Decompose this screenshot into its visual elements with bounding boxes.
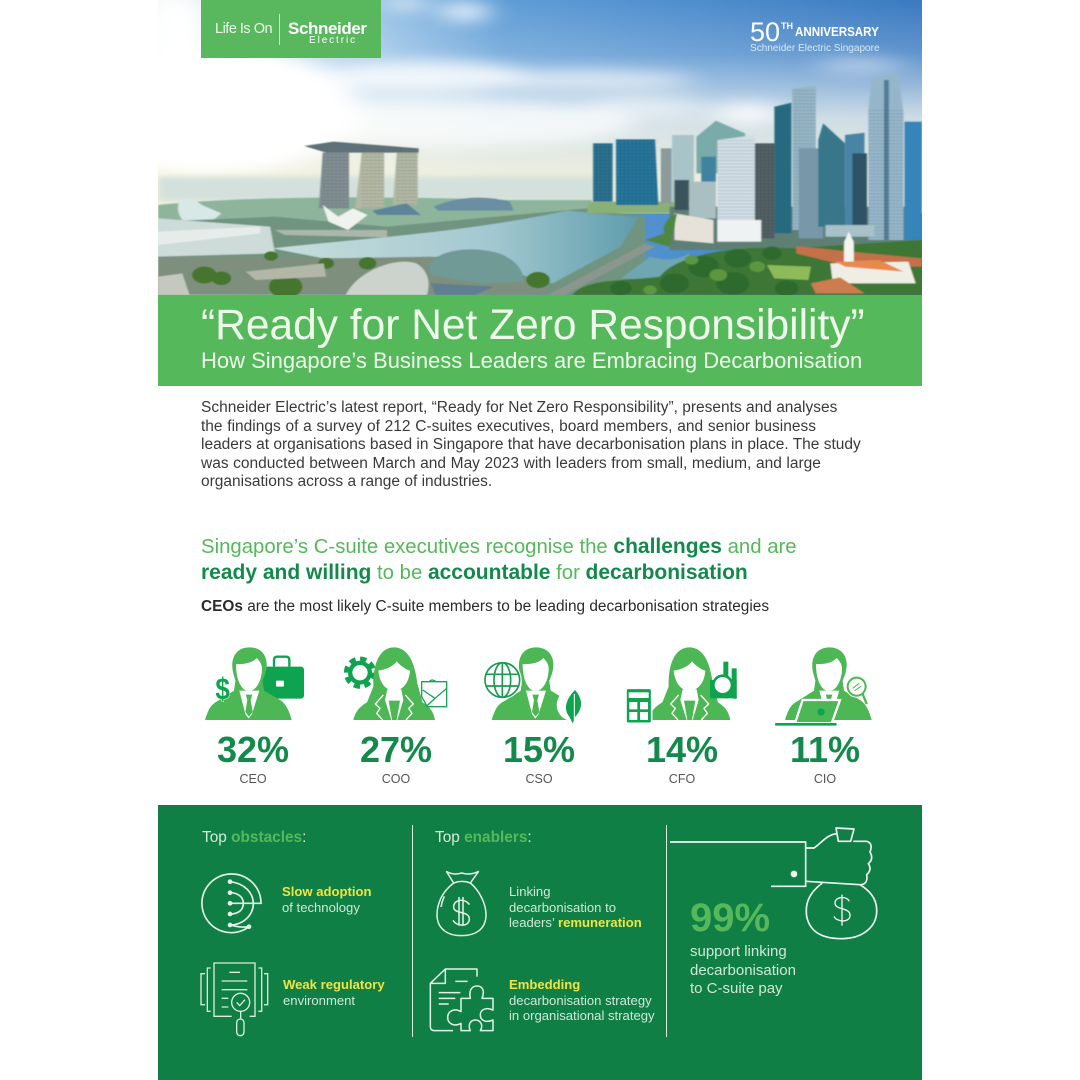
logo tagline — [215, 21, 272, 37]
logo tagline: On — [254, 21, 272, 37]
icon: COO — [346, 647, 447, 720]
intro paragraph: Schneider Electric’s latest report, “Ready for Net Zero Responsibility”, presents and analyses — [201, 399, 837, 416]
TH superscript: TH — [781, 21, 793, 31]
section heading: ready and willing to be accountable for decarbonisation — [201, 561, 748, 584]
icon: CEO — [205, 647, 304, 720]
logo sub name: Electric — [309, 35, 357, 46]
enabler: embedding: decarbonisation strategy — [509, 992, 652, 1008]
Marina Bay Sands — [158, 142, 645, 295]
stat: CFO: 14% — [646, 729, 718, 770]
anniversary subtitle: Schneider Electric Singapore — [750, 43, 880, 54]
enabler: remuneration: leaders’ remuneration — [509, 915, 642, 930]
icon: hand holding money bag — [670, 827, 878, 940]
stat: CSO: CSO — [525, 772, 553, 786]
icon: money bag — [436, 870, 487, 936]
icon: puzzle document — [430, 968, 494, 1032]
panel: obstacles and enablers — [158, 805, 922, 1080]
obstacle: slow adoption: Slow adoption — [282, 884, 371, 899]
icon: CEO: $ — [215, 672, 230, 707]
title banner — [158, 295, 922, 386]
subtitle: How Singapore’s Business Leaders are Embracing Decarbonisation — [201, 348, 862, 373]
stat: CSO: 15% — [503, 729, 575, 770]
anniversary word: ANNIVERSARY — [795, 24, 879, 39]
main title: “Ready for Net Zero Responsibility” — [201, 302, 865, 349]
section heading: Singapore’s C-suite executives recognise the challenges and are — [201, 535, 797, 558]
role icons row — [205, 647, 872, 726]
enabler: remuneration: Linking — [509, 884, 550, 899]
stat: CIO: CIO — [814, 772, 836, 786]
icon: regulation document — [200, 962, 268, 1036]
logo tagline: Life Is — [215, 21, 250, 37]
intro paragraph: leaders at organisations based in Singapore that have decarbonisation plans in place. The study — [201, 436, 861, 453]
stat: 99 percent: 99% — [690, 896, 770, 940]
intro paragraph: was conducted between March and May 2023 with leaders from small, medium, and large — [201, 455, 821, 472]
obstacle: weak regulation: environment — [283, 992, 355, 1008]
logo block — [201, 0, 381, 58]
stat caption: to C-suite pay — [690, 980, 783, 997]
icon: technology circuit — [201, 873, 262, 934]
stat: CFO: CFO — [669, 772, 695, 786]
stat: CEO: 32% — [217, 729, 289, 770]
icon: CIO — [775, 647, 872, 726]
enabler: remuneration: decarbonisation to — [509, 900, 616, 914]
intro paragraph: organisations across a range of industries. — [201, 473, 492, 490]
stat: CIO: 11% — [790, 729, 860, 770]
obstacle: weak regulation — [283, 977, 385, 1008]
intro paragraph — [201, 399, 861, 490]
enabler: embedding: in organisational strategy — [509, 1008, 655, 1023]
stat: CEO: CEO — [239, 772, 267, 786]
enabler: remuneration — [509, 884, 642, 930]
obstacle: weak regulation: Weak regulatory — [283, 977, 385, 992]
icon: CSO — [483, 647, 589, 723]
50 numeral: 50 — [750, 17, 780, 47]
obstacles heading: Top obstacles: — [202, 829, 306, 846]
hero photo: Singapore skyline — [158, 0, 922, 295]
stat: COO: 27% — [360, 729, 432, 770]
section heading — [201, 535, 797, 584]
enablers heading: Top enablers: — [435, 829, 532, 846]
logo name: Schneider — [288, 19, 367, 38]
obstacle: slow adoption — [282, 884, 371, 914]
stat caption: support linking — [690, 943, 787, 960]
stat caption: decarbonisation — [690, 962, 796, 978]
icon: CFO — [626, 647, 737, 723]
foreground: domes, bridge, trees, heritage buildings — [158, 213, 922, 298]
anniversary badge — [750, 17, 880, 54]
enabler: embedding — [509, 977, 655, 1023]
stat: COO: COO — [382, 772, 410, 786]
intro paragraph: the findings of a survey of 212 C-suites executives, board members, and senior business — [201, 418, 816, 435]
obstacle: slow adoption: of technology — [282, 900, 360, 914]
city towers — [587, 74, 922, 250]
enabler: embedding: Embedding — [509, 977, 580, 992]
subheading: CEOs are the most likely C-suite members to be leading decarbonisation strategies — [201, 598, 769, 615]
stat caption — [690, 943, 796, 997]
